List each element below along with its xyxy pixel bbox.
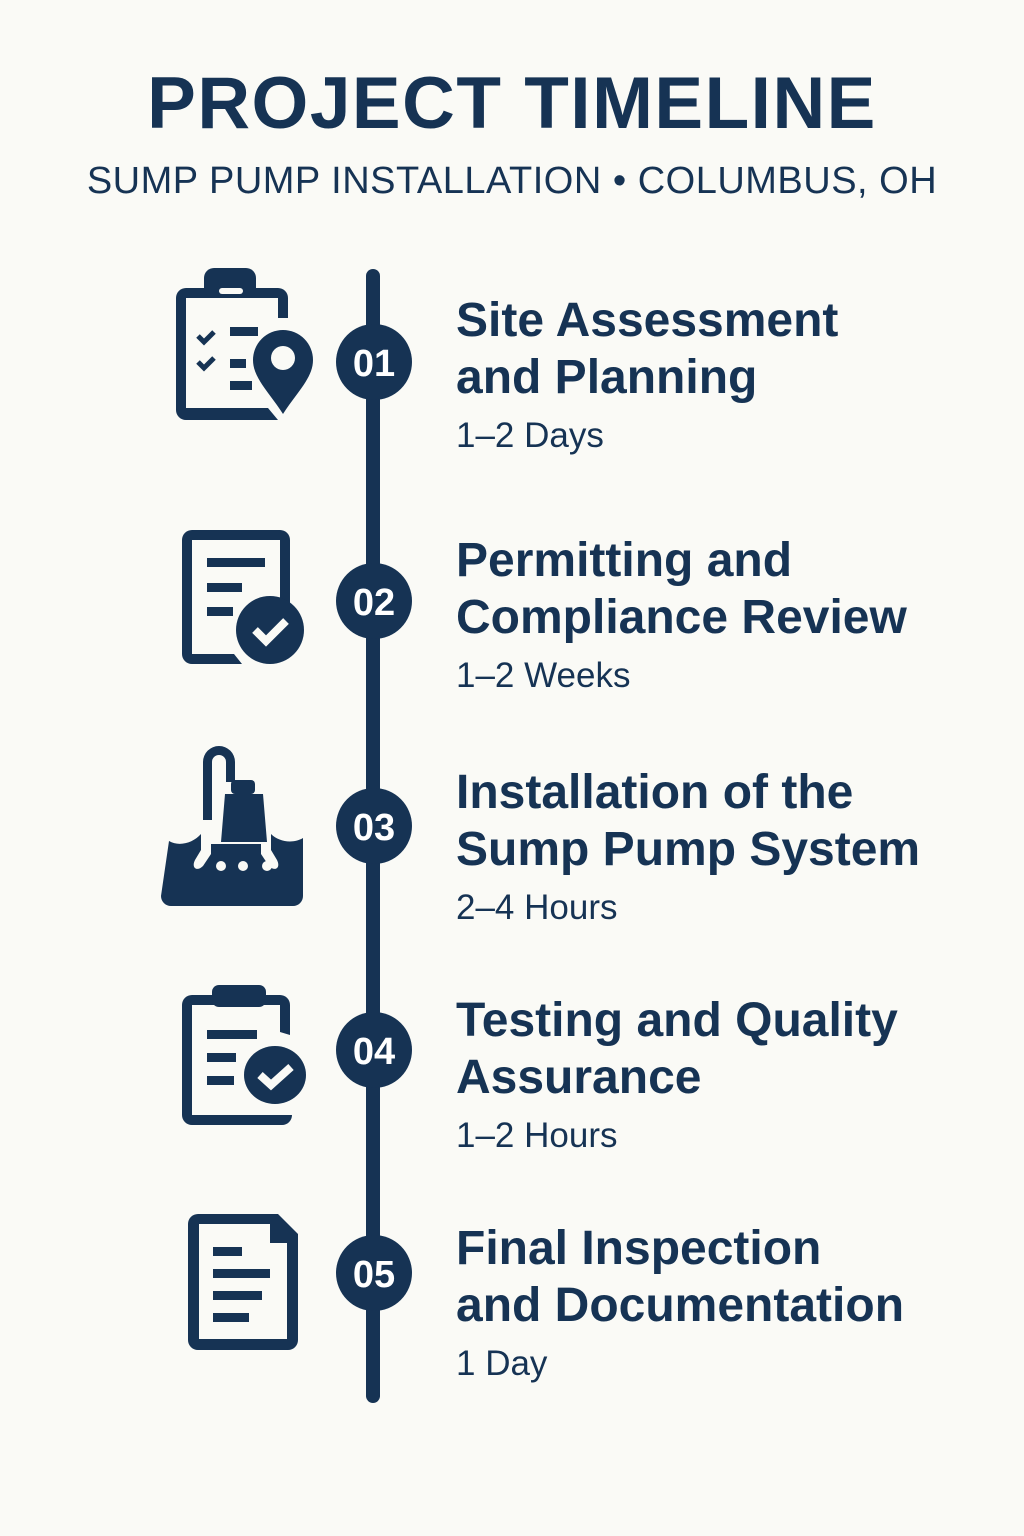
step 2 text: Permitting and	[456, 534, 792, 587]
step 1 text: 1–2 Days	[456, 416, 604, 455]
step 3 text	[456, 766, 920, 927]
step 4 text: Assurance	[456, 1051, 701, 1104]
marker 01	[336, 324, 412, 400]
marker 02	[336, 563, 412, 639]
marker 01: 01	[353, 343, 395, 385]
step 1 text: and Planning	[456, 351, 757, 404]
step 5 text: and Documentation	[456, 1279, 904, 1332]
step 5 text	[456, 1222, 904, 1383]
step 3 text: Sump Pump System	[456, 823, 920, 876]
icon: clipboard with check	[182, 985, 306, 1125]
step 3 text: 2–4 Hours	[456, 888, 617, 927]
icon: document with check	[182, 530, 304, 664]
timeline line	[366, 276, 380, 1396]
step 4 text: Testing and Quality	[456, 994, 898, 1047]
icon: sump pump	[161, 746, 303, 906]
step 1 text	[456, 294, 838, 455]
marker 05: 05	[353, 1254, 395, 1296]
step 1 text: Site Assessment	[456, 294, 838, 347]
marker 04	[336, 1012, 412, 1088]
step 2 text: 1–2 Weeks	[456, 656, 630, 695]
icon: clipboard with location pin	[176, 268, 313, 420]
step 2 text: Compliance Review	[456, 591, 907, 644]
step 5 text: 1 Day	[456, 1344, 547, 1383]
icon: document	[188, 1214, 298, 1350]
title: PROJECT TIMELINE	[147, 63, 877, 144]
step 3 text: Installation of the	[456, 766, 853, 819]
marker 05	[336, 1235, 412, 1311]
step 4 text	[456, 994, 898, 1155]
marker 02: 02	[353, 582, 395, 624]
marker 04: 04	[353, 1031, 395, 1073]
marker 03	[336, 788, 412, 864]
marker 03: 03	[353, 807, 395, 849]
subtitle: SUMP PUMP INSTALLATION • COLUMBUS, OH	[87, 160, 937, 202]
step 2 text	[456, 534, 907, 695]
step 5 text: Final Inspection	[456, 1222, 821, 1275]
step 4 text: 1–2 Hours	[456, 1116, 617, 1155]
